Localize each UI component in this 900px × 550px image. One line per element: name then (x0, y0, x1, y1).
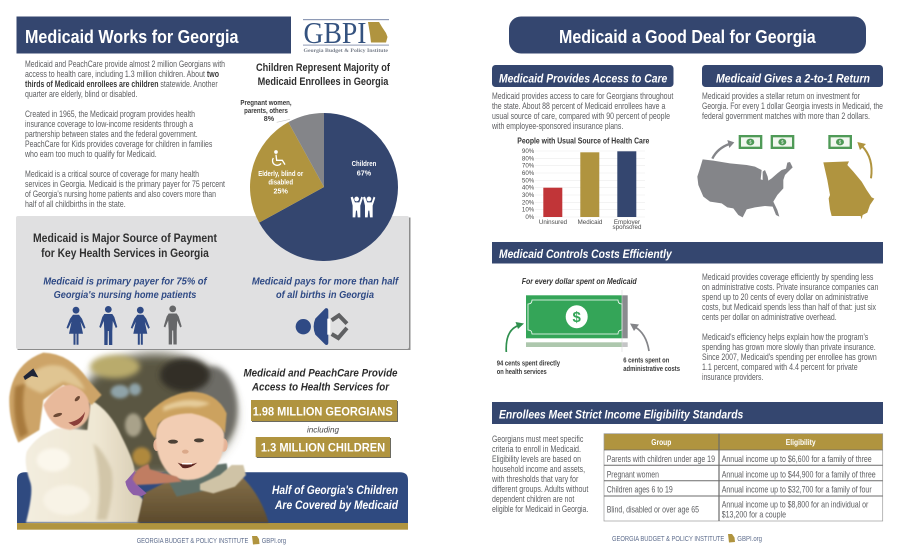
left footer: GBPI.org (262, 536, 286, 545)
x axis labels: Uninsured (539, 219, 568, 226)
icon: dollar bill 3: $ (839, 140, 842, 145)
arrow: Georgia to bill (857, 142, 872, 178)
heading: access to health services (244, 368, 398, 394)
bar: uninsured (543, 188, 562, 217)
right footer: GBPI.org (737, 534, 762, 543)
eligibility text: with thresholds that vary for (491, 474, 578, 484)
heading: access to health services: Access to Health Services for (251, 382, 390, 394)
boy (137, 392, 269, 523)
intro text block: thirds of Medicaid enrollees are children statewide. Another (25, 79, 218, 89)
chart heading: children majority (256, 62, 390, 88)
section header: controls costs: Medicaid Controls Costs Efficiently (499, 247, 673, 261)
panel: major source of payment (16, 216, 410, 350)
panel heading: Medicaid is Major Source of Payment (33, 232, 217, 245)
y axis labels: 10% (522, 207, 535, 214)
x axis labels: Employer (614, 219, 640, 226)
table row: pregnant women: Pregnant women (607, 470, 659, 480)
y axis labels: 20% (522, 199, 535, 206)
stat box: 1.3 million children (256, 437, 391, 458)
intro text block: of Georgia's nursing home patients and also covers more than (25, 189, 216, 199)
intro text block: services in Georgia. Medicaid is the primary payer for 75 percent (25, 179, 225, 189)
births callout: of all births in Georgia (276, 290, 374, 301)
y axis labels: 90% (522, 148, 535, 155)
label: 94 cents: on health services (497, 367, 547, 376)
pie label: pregnant women, parents, others: parents, others (244, 106, 288, 115)
access to care text: Medicaid provides access to care for Georgians throughout (492, 91, 674, 101)
intro text block: who earn too much to qualify for Medicaid. (24, 149, 157, 159)
table row: pregnant women (607, 470, 876, 480)
banner text: Half of Georgia's Children (272, 483, 398, 497)
intro text block: half of all childbirths in the state. (25, 199, 126, 209)
pie label: pregnant women, parents, others: 8% (264, 114, 275, 123)
table row: children: Children ages 6 to 19 (607, 484, 673, 494)
stat box: 1.98 million Georgians: 1.98 MILLION GEORGIANS (253, 405, 393, 418)
intro text block: partnership between states and the federal government. (25, 129, 198, 139)
chart heading: children majority: Medicaid Enrollees in Georgia (258, 76, 389, 88)
chart title: People with Usual Source of Health Care (517, 136, 650, 146)
label: 94 cents: 94 cents spent directly (497, 358, 560, 368)
intro text block (24, 59, 225, 209)
icon: Georgia map (823, 161, 874, 219)
girl's hand on boy's chin (125, 464, 182, 496)
pie label: children: Children (352, 159, 376, 168)
efficiency text (702, 272, 878, 382)
icon: dollar bill split: $ (573, 309, 582, 326)
girl (9, 353, 143, 523)
efficiency text: insurance providers. (702, 372, 763, 382)
nursing home callout: Georgia's nursing home patients (54, 290, 197, 301)
intro text block: Created in 1965, the Medicaid program provides health (25, 109, 195, 119)
label: 6 cents: administrative costs (623, 364, 680, 373)
icon: wheelchair (272, 150, 285, 165)
right footer: GEORGIA BUDGET & POLICY INSTITUTE (612, 534, 724, 543)
pie label: elderly, blind or disabled: 25% (274, 186, 288, 196)
pie label: pregnant women, parents, others (240, 98, 292, 123)
births callout (252, 276, 400, 301)
photo background (75, 353, 237, 477)
y axis labels (522, 148, 535, 221)
label: 94 cents (497, 358, 560, 376)
nursing home callout (43, 276, 208, 301)
heading: access to health services: Medicaid and PeachCare Provide (244, 368, 398, 380)
icon: dollar bill 2 (771, 135, 794, 149)
stat box: 1.3 million children: 1.3 MILLION CHILDREN (261, 441, 385, 454)
right page title banner: Medicaid a Good Deal for Georgia (559, 26, 816, 47)
icon: four people, three of four highlighted (66, 306, 182, 345)
section header: 2-to-1 return (702, 65, 883, 87)
bar: Medicaid (580, 152, 599, 217)
icon: dollar bill 1: $ (749, 140, 752, 145)
x axis labels: Medicaid (578, 219, 603, 226)
left page title banner: Medicaid Works for Georgia (25, 26, 239, 47)
icon: dollar bill split (526, 290, 628, 352)
table row: blind, disabled or over 65 (607, 500, 868, 520)
table row: children (607, 484, 872, 494)
section header: eligibility: Enrollees Meet Strict Income Eligibility Standards (499, 408, 743, 422)
eligibility text (491, 434, 589, 514)
section header: eligibility (492, 402, 883, 424)
intro text block: quarter are elderly, blind or disabled. (25, 89, 137, 99)
connector text: including: including (307, 424, 339, 434)
y axis labels: 50% (522, 177, 535, 184)
arrow: grey (630, 324, 649, 351)
intro text block: Medicaid is a critical source of coverage for many health (25, 169, 199, 179)
table row: blind, disabled or over 65: Blind, disabled or over age 65 (607, 504, 699, 514)
return text (702, 91, 883, 121)
icon: US map (697, 159, 793, 217)
nursing home callout: Medicaid is primary payer for 75% of (43, 276, 208, 288)
table header: Group (651, 437, 671, 447)
label: 6 cents: 6 cents spent on (623, 356, 669, 364)
icon: dollar bill 2: $ (781, 140, 784, 145)
access to care text: the state. About 88 percent of Medicaid enrollees have a (492, 101, 666, 111)
efficiency text: cents per dollar on administrative overhead. (702, 312, 837, 322)
panel heading: for Key Health Services in Georgia (41, 247, 209, 260)
y axis labels: 0% (525, 214, 535, 221)
chart heading: children majority: Children Represent Majority of (256, 62, 390, 74)
arrow: US to bills (712, 140, 734, 159)
access to care text (491, 91, 674, 131)
intro text block: PeachCare for Kids provides coverage for children in families (25, 139, 213, 149)
access to care text: with employee-sponsored insurance plans. (491, 121, 623, 131)
section header: 2-to-1 return: Medicaid Gives a 2-to-1 Return (716, 71, 870, 85)
icon: children with raised arms (351, 197, 375, 217)
dollar graphic: 94 and 6 cents (497, 276, 680, 376)
section header: access to care (492, 65, 674, 87)
eligibility text: Georgians must meet specific (492, 434, 584, 444)
map graphic: federal match (697, 135, 874, 219)
pie label: children (352, 159, 376, 178)
eligibility text: Eligibility levels are based on (492, 454, 581, 464)
y axis labels: 40% (522, 185, 535, 192)
eligibility text: dependent children are not (492, 494, 575, 504)
arrow: green (506, 322, 524, 352)
y axis labels: 60% (522, 170, 535, 177)
births callout: Medicaid pays for more than half (252, 276, 400, 288)
banner text (272, 483, 399, 512)
table row: parents: Parents with children under age 19 (607, 454, 715, 464)
stat box: 1.98 million Georgians (251, 400, 398, 422)
x axis labels: sponsored (613, 224, 642, 231)
pie label: children: 67% (357, 168, 372, 178)
eligibility text: eligible for Medicaid in Georgia. (492, 504, 588, 514)
table row: parents (607, 454, 872, 464)
bottom banner: half of children covered (17, 472, 408, 530)
icon: dollar bill 3 (828, 135, 852, 149)
pie label: elderly, blind or disabled (258, 169, 303, 196)
eligibility text: different groups. Adults without (492, 484, 589, 494)
pie label: pregnant women, parents, others: Pregnant women, (240, 98, 292, 107)
access to care text: usual source of care, compared with 90 percent of people (492, 111, 670, 121)
panel heading (33, 232, 217, 260)
efficiency text: 1.1 percent, compared with 4.4 percent for private (702, 362, 858, 372)
section header: controls costs (492, 242, 883, 264)
section header: access to care: Medicaid Provides Access to Care (499, 71, 667, 85)
left page title banner (16, 16, 291, 54)
pie label: elderly, blind or disabled: disabled (268, 178, 293, 186)
table row: blind, disabled or over 65: $13,200 for a couple (722, 510, 786, 520)
intro text block: access to health care, including 1.3 million children. About two (25, 69, 219, 79)
table header (604, 434, 883, 450)
GBPI logo: GBPI (304, 15, 366, 50)
icon: dollar bill 1 (739, 135, 762, 149)
label: 6 cents (623, 356, 680, 373)
eligibility text: criteria to enroll in Medicaid. (492, 444, 581, 454)
y axis labels: 30% (522, 192, 535, 199)
y axis labels: 70% (522, 163, 535, 170)
right page title banner (509, 16, 866, 54)
table header: Eligibility (786, 437, 816, 447)
banner text: Are Covered by Medicaid (274, 498, 399, 512)
left footer: GEORGIA BUDGET & POLICY INSTITUTE (137, 536, 248, 545)
eligibility text: household income and assets, (492, 464, 585, 474)
GBPI logo: Georgia Budget & Policy Institute (304, 48, 389, 54)
x axis labels (539, 219, 642, 231)
icon: birth (296, 308, 347, 345)
y axis labels: 80% (522, 155, 535, 162)
bar: employer sponsored (617, 151, 636, 217)
pie chart: Medicaid enrollees (240, 98, 398, 261)
pie label: elderly, blind or disabled: Elderly, blind or (258, 169, 303, 178)
intro text block: Medicaid and PeachCare provide almost 2 million Georgians with (25, 59, 225, 69)
graphic heading: For every dollar spent on Medicaid (522, 276, 637, 286)
bar chart: usual source of health care (517, 136, 650, 231)
eligibility table (604, 434, 883, 521)
photo: two young children (9, 353, 269, 523)
intro text block: insurance coverage to low-income residents through a (25, 119, 194, 129)
